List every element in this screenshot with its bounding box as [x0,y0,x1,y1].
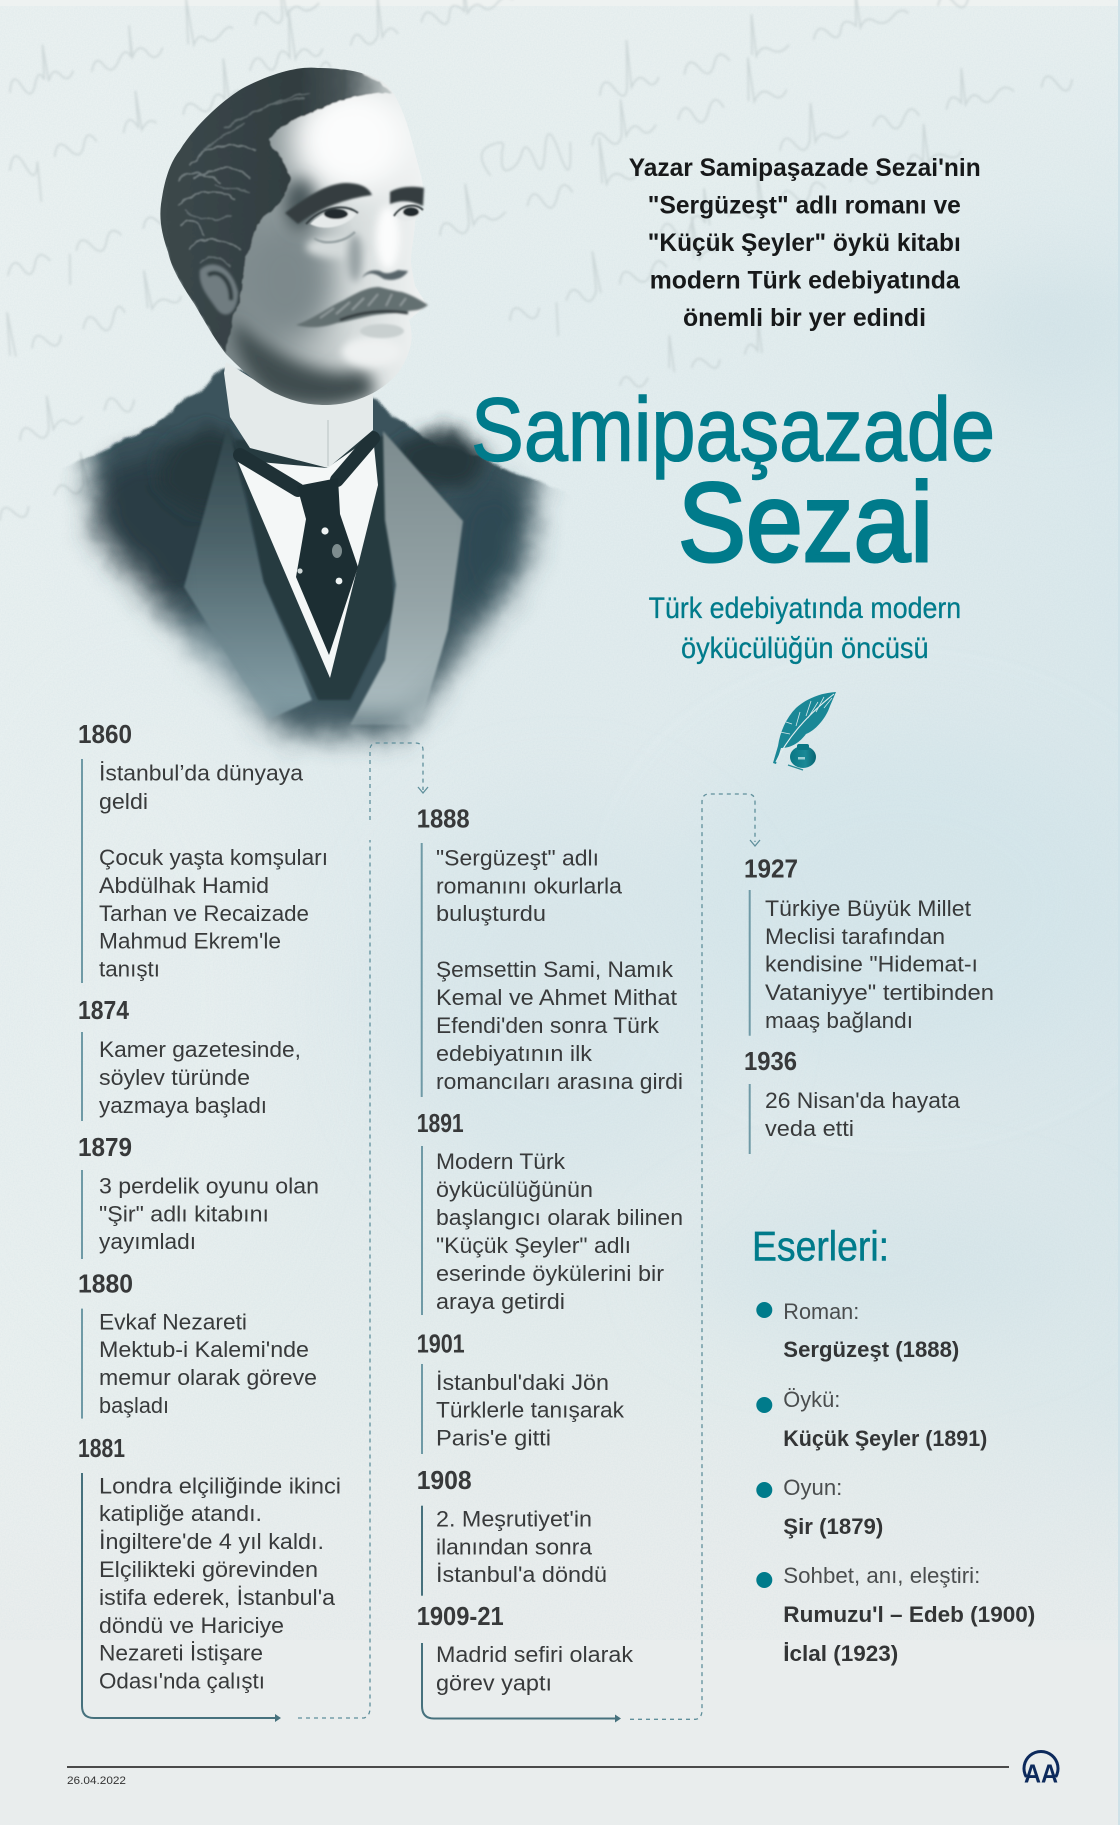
right eye [394,206,423,221]
play item: Oyun: [783,1475,842,1500]
1891 entry: 1891 [417,1108,464,1138]
1874 entry [78,995,301,1121]
1881 entry: Londra elçiliğinde ikinci [99,1474,341,1499]
1927 entry: maaş bağlandı [765,1008,913,1033]
title [471,381,995,585]
1891 entry: araya getirdi [436,1289,565,1314]
1881 entry: İngiltere'de 4 yıl kaldı. [99,1529,324,1554]
1880 entry: Mektub-i Kalemi'nde [99,1337,309,1362]
date: 26.04.2022 [67,1775,126,1787]
1927 entry: Vataniyye" tertibinden [765,980,994,1005]
1888 entry [417,804,683,1097]
1880 entry: Evkaf Nezareti [99,1309,247,1334]
1874 entry: 1874 [78,995,129,1025]
1927 entry: 1927 [744,854,798,884]
essay item: Sohbet, anı, eleştiri: [783,1563,980,1588]
essay item: Rumuzu'l – Edeb (1900) [783,1602,1035,1627]
timeline column 1 [78,719,428,1722]
heading: summary: "Sergüzeşt" adlı romanı ve [648,192,961,220]
1908 entry: 2. Meşrutiyet'in [436,1507,592,1532]
heading: summary: modern Türk edebiyatında [650,266,961,294]
1888 entry: 1888 [417,804,470,834]
heading: summary: "Küçük Şeyler" öykü kitabı [648,229,961,257]
left lapel [184,425,312,720]
heading: summary: Yazar Samipaşazade Sezai'nin [629,154,981,182]
1860 entry [78,719,328,983]
waistcoat [235,436,394,700]
jacket [65,366,561,760]
icon: quill and inkwell [773,692,836,770]
1927 entry: kendisine "Hidemat-ı [765,952,978,977]
1881 entry: döndü ve Hariciye [99,1613,284,1638]
title: Samipaşazade [471,381,995,481]
necktie [240,438,373,655]
1888 entry: romancıları arasına girdi [436,1069,683,1094]
1888 entry: edebiyatının ilk [436,1041,593,1066]
1909-21 entry: 1909-21 [417,1601,504,1631]
1901 entry: Türklerle tanışarak [436,1398,625,1423]
nose [362,270,408,280]
title: Sezai [678,460,933,585]
moustache [296,287,428,327]
left eye [306,207,358,242]
1901 entry: 1901 [417,1329,465,1359]
1874 entry: yazmaya başladı [99,1093,267,1118]
subtitle: Türk edebiyatında modern [649,592,961,625]
1891 entry: başlangıcı olarak bilinen [436,1205,683,1230]
1860 entry: Tarhan ve Recaizade [99,901,309,926]
1881 entry: 1881 [78,1433,125,1463]
timeline column 3 [744,854,994,1154]
icon: AA logo: AA [1024,1759,1058,1789]
1860 entry: geldi [99,789,148,814]
1860 entry: 1860 [78,719,132,749]
subtitle [649,592,961,665]
panel: works [752,1223,1035,1666]
portrait of Samipaşazade Sezai [50,60,570,790]
1909-21 entry: Madrid sefiri olarak [436,1642,634,1667]
story item: Öykü: [783,1387,840,1412]
1927 entry: Türkiye Büyük Millet [765,896,971,921]
1881 entry: Elçilikteki görevinden [99,1557,318,1582]
1881 entry: katipliğe atandı. [99,1501,262,1526]
lower lip [360,324,404,338]
story item: Küçük Şeyler (1891) [783,1426,987,1451]
1936 entry: 1936 [744,1046,797,1076]
1888 entry: Şemsettin Sami, Namık [436,957,674,982]
right lapel [350,431,463,725]
heading: summary [629,154,981,332]
eyebrows [285,183,424,224]
1901 entry: Paris'e gitti [436,1426,551,1451]
essay item [756,1563,1035,1666]
shirt front [237,436,378,678]
1880 entry [78,1268,317,1419]
1891 entry: öykücülüğünün [436,1177,593,1202]
head [160,68,426,405]
story item [756,1387,987,1451]
play item: Şir (1879) [783,1514,883,1539]
hair highlights [178,93,310,266]
ear [200,265,238,315]
1908 entry: ilanından sonra [436,1535,593,1560]
1880 entry: memur olarak göreve [99,1365,317,1390]
1936 entry: veda etti [765,1116,854,1141]
1901 entry: İstanbul'daki Jön [436,1370,609,1395]
1860 entry: Mahmud Ekrem'le [99,929,281,954]
1891 entry: eserinde öykülerini bir [436,1261,664,1286]
1881 entry [78,1433,341,1722]
arrow: dashed connector to column 3 [630,794,760,1719]
1936 entry: 26 Nisan'da hayata [765,1088,961,1113]
1891 entry: Modern Türk [436,1149,566,1174]
1860 entry: Çocuk yaşta komşuları [99,845,328,870]
novel item [756,1299,959,1362]
1860 entry: Abdülhak Hamid [99,873,269,898]
shirt collar [224,362,373,468]
1879 entry: 1879 [78,1132,132,1162]
1936 entry [744,1046,961,1154]
1888 entry: buluşturdu [436,901,546,926]
essay item: İclal (1923) [783,1641,898,1666]
1874 entry: söylev türünde [99,1065,250,1090]
arrow: dashed connector to column 2 [298,743,428,1718]
1881 entry: istifa ederek, İstanbul'a [99,1585,336,1610]
novel item: Sergüzeşt (1888) [783,1337,959,1362]
heading: summary: önemli bir yer edindi [683,304,926,332]
1888 entry: romanını okurlarla [436,874,623,898]
subtitle: öykücülüğün öncüsü [681,632,929,665]
1909-21 entry: görev yaptı [436,1671,552,1696]
1927 entry: Meclisi tarafından [765,924,945,949]
1909-21 entry [417,1601,634,1722]
1881 entry: Nezareti İstişare [99,1641,263,1666]
1891 entry: "Küçük Şeyler" adlı [436,1233,631,1258]
1879 entry: yayımladı [99,1229,196,1254]
1860 entry: İstanbul’da dünyaya [99,761,304,786]
1879 entry [78,1132,319,1259]
1908 entry: 1908 [417,1465,472,1495]
footer [67,1751,1058,1789]
1908 entry: İstanbul'a döndü [436,1562,607,1587]
1880 entry: 1880 [78,1268,133,1298]
1927 entry [744,854,994,1036]
1888 entry: Kemal ve Ahmet Mithat [436,985,677,1010]
play item [756,1475,883,1539]
1874 entry: Kamer gazetesinde, [99,1037,301,1062]
handwriting texture [0,0,1074,525]
1880 entry: başladı [99,1393,169,1418]
1860 entry: tanıştı [99,957,160,982]
1879 entry: "Şir" adlı kitabını [99,1201,269,1226]
1888 entry: Efendi'den sonra Türk [436,1013,660,1038]
1879 entry: 3 perdelik oyunu olan [99,1174,319,1198]
hair [158,66,392,354]
works heading: Eserleri: [752,1223,889,1270]
1908 entry [417,1465,607,1596]
1888 entry: "Sergüzeşt" adlı [436,846,599,870]
timeline column 2 [417,794,760,1722]
novel item: Roman: [783,1299,859,1324]
1881 entry: Odası'nda çalıştı [99,1669,265,1694]
1901 entry [417,1329,625,1454]
1891 entry [417,1108,683,1315]
